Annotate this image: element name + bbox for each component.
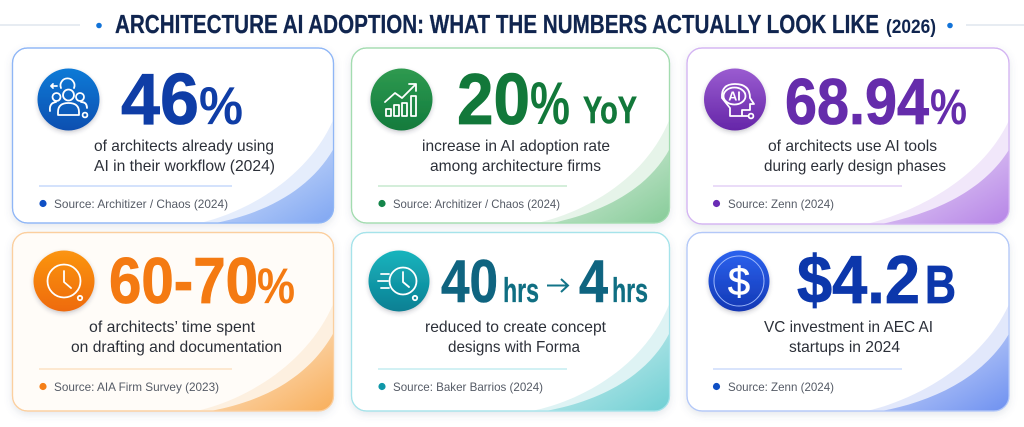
icon: growth chart bbox=[370, 68, 432, 130]
description: designs with Forma bbox=[448, 339, 580, 356]
description bbox=[94, 138, 275, 175]
stat: 40 hrs bbox=[441, 248, 539, 315]
stat: 4 hrs bbox=[579, 248, 648, 315]
description: VC investment in AEC AI bbox=[764, 319, 933, 336]
source: Source: Zenn (2024) bbox=[728, 197, 834, 211]
description: reduced to create concept bbox=[425, 319, 607, 336]
icon: clock bbox=[34, 250, 94, 312]
description: of architects use AI tools bbox=[768, 138, 937, 155]
icon: AI head: AI bbox=[728, 90, 741, 104]
icon: dollar coin: $ bbox=[728, 260, 750, 304]
big stat: 68.94 bbox=[785, 65, 929, 138]
description bbox=[71, 319, 282, 356]
YoY suffix: YoY bbox=[583, 90, 637, 132]
source: Source: AIA Firm Survey (2023) bbox=[54, 380, 219, 394]
big stat: $4.2 bbox=[797, 242, 920, 318]
panel: $4.2B VC investment bbox=[687, 232, 1010, 412]
description: startups in 2024 bbox=[789, 339, 900, 356]
source: Source: Zenn (2024) bbox=[728, 380, 834, 394]
description bbox=[422, 138, 610, 175]
panel: 68.94% early design bbox=[687, 48, 1010, 225]
panel: 40 hrs to 4 hrs bbox=[352, 232, 670, 412]
description bbox=[764, 319, 933, 356]
description: during early design phases bbox=[764, 158, 946, 175]
big stat: 46 bbox=[121, 60, 199, 140]
big stat percent sign: % bbox=[530, 70, 570, 137]
icon: fast clock bbox=[368, 250, 430, 312]
description: of architects’ time spent bbox=[89, 319, 256, 336]
source: Source: Architizer / Chaos (2024) bbox=[54, 197, 228, 211]
icon: people group bbox=[38, 68, 100, 130]
description bbox=[764, 138, 946, 175]
panel: 46% of architects using AI bbox=[12, 48, 334, 224]
title banner bbox=[0, 9, 1024, 39]
big stat percent sign: % bbox=[199, 77, 243, 136]
arrow bbox=[547, 279, 568, 292]
description: AI in their workflow (2024) bbox=[94, 158, 275, 175]
big stat percent sign: % bbox=[930, 79, 967, 135]
description: increase in AI adoption rate bbox=[422, 138, 610, 155]
panel: 20% YoY increase bbox=[352, 48, 670, 224]
title year: (2026) bbox=[886, 17, 936, 38]
stat: 40 hrs: hrs bbox=[503, 272, 539, 310]
description: among architecture firms bbox=[430, 158, 601, 175]
big stat: 60-70 bbox=[109, 244, 258, 317]
stat: 4 hrs: 4 bbox=[579, 248, 609, 315]
description bbox=[425, 319, 607, 356]
description: on drafting and documentation bbox=[71, 339, 282, 356]
panel: 60-70% drafting time bbox=[12, 232, 334, 412]
stat: 4 hrs: hrs bbox=[612, 272, 648, 310]
icon: dollar coin bbox=[708, 250, 770, 312]
big stat percent sign: % bbox=[257, 258, 295, 314]
stat: 40 hrs: 40 bbox=[441, 248, 498, 315]
description: of architects already using bbox=[94, 138, 274, 155]
B suffix: B bbox=[925, 255, 956, 315]
source: Source: Architizer / Chaos (2024) bbox=[393, 197, 560, 211]
source: Source: Baker Barrios (2024) bbox=[393, 380, 543, 394]
big stat: 20 bbox=[457, 60, 530, 140]
icon: AI head bbox=[704, 68, 766, 130]
